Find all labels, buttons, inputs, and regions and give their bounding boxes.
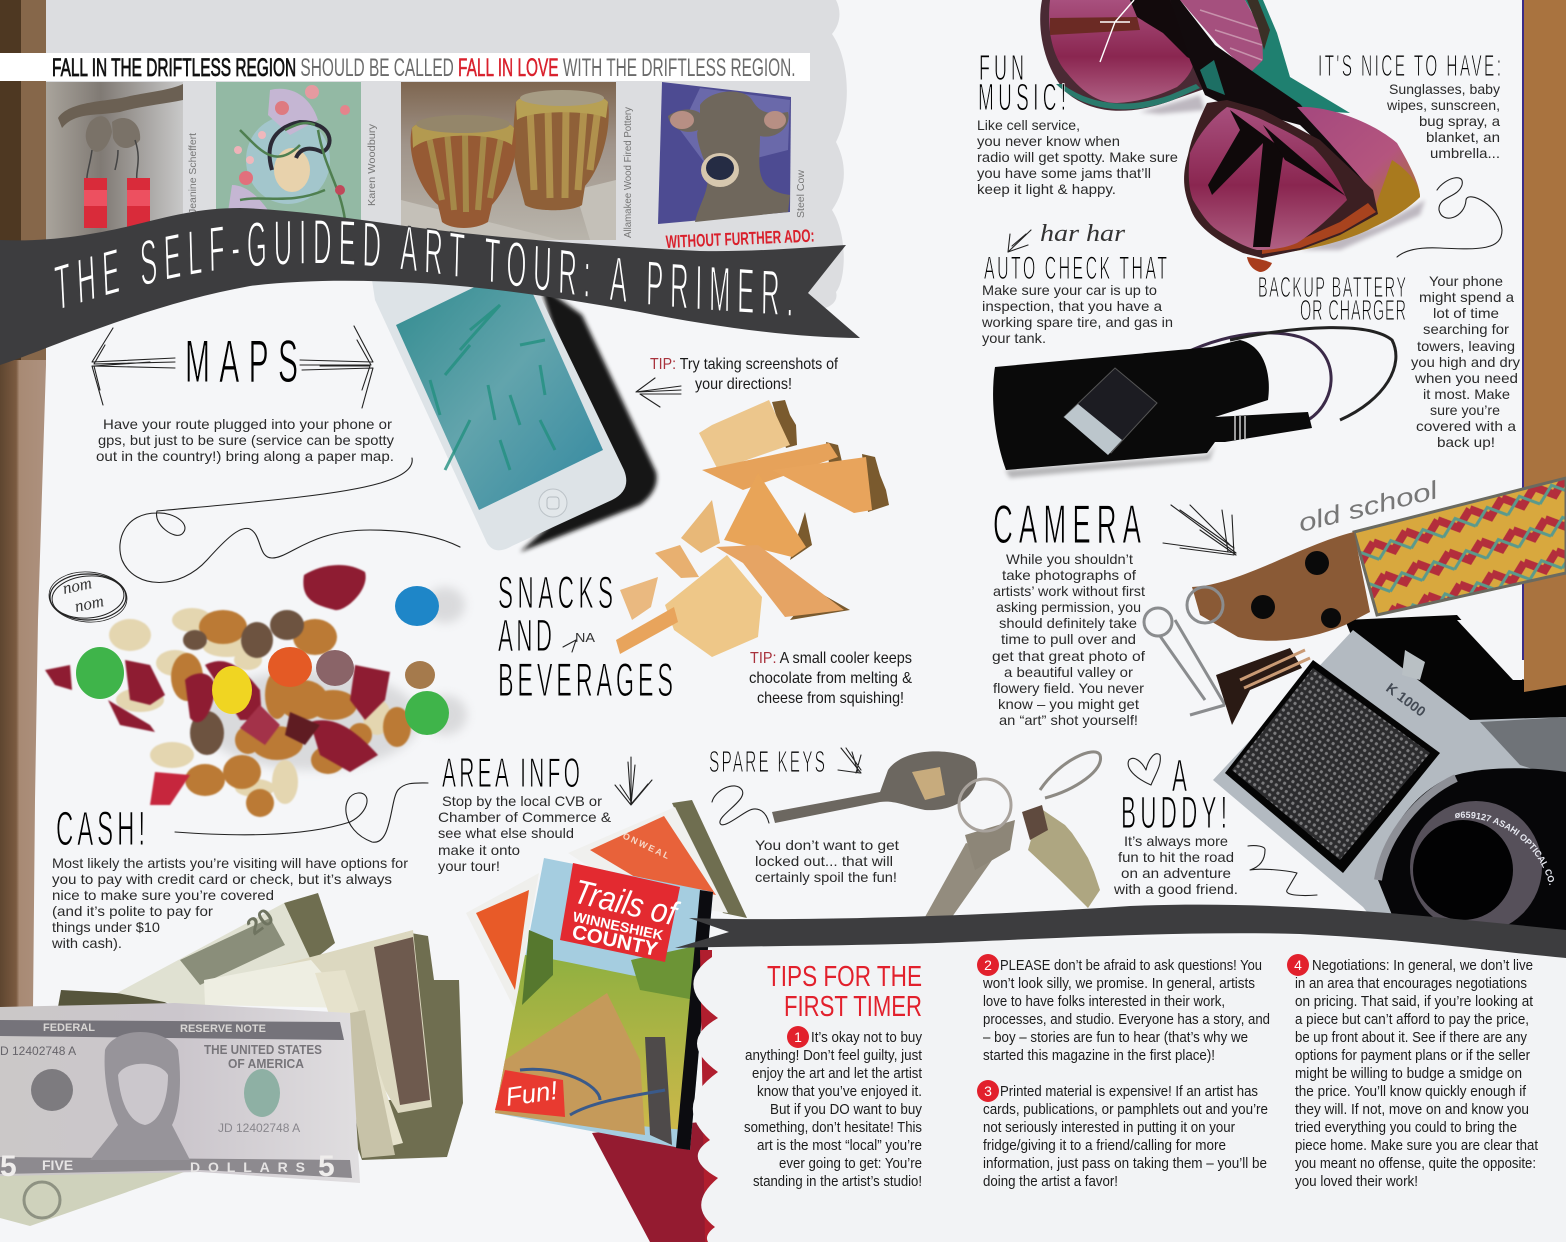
lens bbox=[1374, 768, 1566, 930]
squiggle: buddy bbox=[1248, 846, 1317, 895]
tip 1: 1 bbox=[794, 1029, 802, 1045]
bottom bill bbox=[0, 1170, 190, 1226]
connector bbox=[1064, 368, 1157, 453]
text: area info body bbox=[438, 793, 612, 874]
photo: phone bbox=[372, 265, 657, 552]
heading: maps bbox=[92, 326, 373, 408]
heading: a buddy: BUDDY! bbox=[1121, 788, 1227, 838]
tip 4: 4 bbox=[1294, 957, 1302, 973]
body bbox=[993, 340, 1269, 470]
temple arm seen through lens bbox=[1208, 110, 1347, 247]
text: area info body: your tour! bbox=[438, 858, 500, 874]
lens engraving: ø659127 ASAHI OPTICAL CO. bbox=[1455, 812, 1554, 886]
text: fun music body: you have some jams that’ll bbox=[977, 165, 1151, 181]
left lens bbox=[1049, 0, 1193, 103]
banner: main title bbox=[0, 208, 860, 365]
text: maps body: gps, but just to be sure (service can be spotty bbox=[98, 432, 394, 448]
bill: stack bbox=[205, 930, 432, 1113]
text: auto check body: working spare tire, and gas in bbox=[981, 314, 1173, 330]
heading: snacks and beverages bbox=[498, 568, 673, 706]
photo: sunglasses bbox=[1040, 0, 1425, 272]
heading: snacks and beverages: BEVERAGES bbox=[498, 653, 673, 706]
heading: snacks and beverages: AND bbox=[498, 611, 552, 661]
text: auto check body: your tank. bbox=[982, 330, 1046, 346]
icon: small feathers bbox=[838, 748, 861, 773]
temple frame bbox=[1245, 0, 1350, 113]
left cup bbox=[411, 118, 516, 228]
photo: keys bbox=[772, 751, 1101, 917]
tip: screenshots: TIP: Try taking screenshots of bbox=[650, 356, 838, 373]
heading: snacks and beverages: SNACKS bbox=[498, 568, 613, 618]
cranberries bbox=[45, 565, 390, 805]
text: auto check body bbox=[981, 282, 1173, 346]
tip 3: Printed material is expensive! If an artist has bbox=[1000, 1084, 1258, 1100]
wood table left bbox=[0, 0, 46, 1010]
tip 4: options for payment plans or if the seller bbox=[1295, 1048, 1530, 1064]
text: backup battery body: covered with a bbox=[1416, 418, 1516, 434]
cover title block: WINNESHIEK bbox=[571, 908, 665, 943]
text: backup battery body: searching for bbox=[1423, 321, 1509, 337]
bill labels: FEDERAL bbox=[43, 1022, 95, 1034]
tip 2: started this magazine in the first place)! bbox=[983, 1048, 1215, 1064]
text: camera body: a beautiful valley or bbox=[1004, 664, 1133, 680]
text: backup battery body: it most. Make bbox=[1423, 386, 1510, 402]
text: keys body bbox=[755, 837, 899, 885]
ribbon: tips divider bbox=[675, 905, 1566, 958]
text: cash body: (and it’s polite to pay for bbox=[52, 903, 213, 919]
wood table right bbox=[1522, 0, 1566, 700]
tip 4: be up front about it. See if there are any bbox=[1295, 1030, 1528, 1046]
old school note: old school bbox=[1296, 476, 1442, 538]
photo: chips bbox=[616, 400, 889, 657]
upper right lens bbox=[1180, 0, 1263, 73]
heading: camera: CAMERA bbox=[993, 495, 1141, 556]
nose pad bbox=[1247, 257, 1272, 272]
icon: camera feathers bbox=[1163, 505, 1236, 555]
main lens frame bbox=[1184, 100, 1378, 258]
banner title text: THE SELF-GUIDED ART TOUR: A PRIMER. bbox=[54, 220, 791, 316]
text: camera body: should definitely take bbox=[999, 615, 1137, 631]
caption: Allamakee Wood Fired Pottery: Allamakee Wood Fired Pottery bbox=[623, 107, 634, 238]
olive shadows bbox=[284, 893, 335, 962]
tip 2: won’t look silly, we promise. In general, artists bbox=[982, 976, 1255, 992]
heading: area info bbox=[442, 750, 652, 805]
tip: cooler: TIP: A small cooler keeps bbox=[750, 650, 912, 667]
tip 2: 2 bbox=[984, 957, 992, 973]
portrait bbox=[90, 1032, 190, 1160]
tip 4: the price. You’ll know quickly enough if bbox=[1295, 1084, 1527, 1100]
text: keys body: locked out... that will bbox=[755, 853, 893, 869]
doodle: NA: NA bbox=[575, 630, 595, 645]
tip 1: know that you’ve enjoyed it. bbox=[757, 1084, 922, 1100]
photo: wood-fired cups bbox=[401, 82, 616, 240]
gold end piece bbox=[1280, 160, 1420, 253]
top plate highlight bbox=[1480, 717, 1566, 780]
text: fun music body: keep it light & happy. bbox=[977, 181, 1116, 197]
K1000 logo: K 1000 bbox=[1383, 680, 1429, 720]
tip 4: tried everything you could to bring the bbox=[1295, 1120, 1517, 1136]
caption: Jeanine Scheffert: Jeanine Scheffert bbox=[188, 133, 199, 214]
text: backup battery body: might spend a bbox=[1419, 289, 1514, 305]
text: cash body: things under $10 bbox=[52, 919, 160, 935]
text: camera body: take photographs of bbox=[1002, 567, 1136, 583]
text: camera body: artists’ work without first bbox=[993, 583, 1145, 599]
tip 1: But if you DO want to buy bbox=[770, 1102, 923, 1118]
M&M green bbox=[76, 647, 124, 699]
shadows bbox=[200, 587, 467, 770]
tip 3 bbox=[977, 1080, 1268, 1190]
tip 2: love to have folks interested in their work, bbox=[983, 994, 1225, 1010]
text: buddy body: It’s always more bbox=[1124, 833, 1228, 849]
text: camera body: While you shouldn’t bbox=[1006, 551, 1133, 567]
silver key bbox=[925, 843, 997, 917]
text: backup battery body bbox=[1411, 273, 1520, 450]
heading: a buddy bbox=[1121, 751, 1227, 838]
heading: maps: MAPS bbox=[185, 329, 298, 396]
clasp bbox=[1144, 587, 1225, 715]
text: backup battery body: lot of time bbox=[1433, 305, 1499, 321]
tip 1: It’s okay not to buy bbox=[811, 1030, 923, 1046]
nuts bbox=[109, 608, 391, 804]
front five dollar bill: 5 bbox=[318, 1150, 335, 1183]
tip 4: on pricing. That said, if you’re looking at bbox=[1295, 994, 1533, 1010]
crimson booklet bbox=[592, 1120, 740, 1242]
text: backup battery body: towers, leaving bbox=[1417, 338, 1515, 354]
tip 3: not seriously interested in putting it on your bbox=[983, 1120, 1235, 1136]
right cup bbox=[513, 92, 609, 210]
M&M grey-brown bbox=[316, 650, 354, 686]
text: nice to have body bbox=[1386, 81, 1500, 161]
chocolate pieces bbox=[183, 610, 304, 755]
front five dollar bill: D 12402748 A bbox=[0, 1044, 76, 1058]
dark key bbox=[772, 751, 977, 823]
text: camera body: flowery field. You never bbox=[993, 680, 1144, 696]
front five dollar bill: DOLLARS bbox=[190, 1159, 305, 1175]
caption: Steel Cow: Steel Cow bbox=[796, 169, 807, 218]
plug bbox=[1215, 412, 1312, 442]
tip 4: in an area that encourages negotiations bbox=[1295, 976, 1527, 992]
text: cash body: nice to make sure you’re covered bbox=[52, 887, 274, 903]
tip: screenshots: your directions! bbox=[695, 376, 792, 393]
heading: spare keys: SPARE KEYS bbox=[709, 745, 825, 780]
tip 2: PLEASE don’t be afraid to ask questions! You bbox=[1000, 958, 1262, 974]
text: cash body: with cash). bbox=[51, 935, 122, 951]
tip 4 bbox=[1287, 954, 1538, 1190]
text: camera body: asking permission, you bbox=[996, 599, 1141, 615]
front five dollar bill: RESERVE NOTE bbox=[180, 1023, 266, 1035]
seals bbox=[31, 1069, 73, 1111]
tip 4: you loved their work! bbox=[1295, 1174, 1418, 1190]
tip: screenshots bbox=[636, 356, 838, 407]
text: buddy body bbox=[1113, 833, 1238, 897]
fun label: Fun! bbox=[504, 1075, 559, 1112]
text: nice to have body: wipes, sunscreen, bbox=[1386, 97, 1500, 113]
photo: charger bbox=[993, 328, 1396, 478]
icon: heart bbox=[1128, 754, 1160, 785]
tip 1 bbox=[744, 1026, 923, 1190]
text: buddy body: with a good friend. bbox=[1113, 881, 1238, 897]
heading: backup battery: OR CHARGER bbox=[1300, 293, 1406, 326]
front five dollar bill: 5 bbox=[0, 1150, 17, 1183]
M&M green 2 bbox=[405, 691, 449, 735]
front five dollar bill: OF AMERICA bbox=[228, 1056, 305, 1071]
text: area info body: Chamber of Commerce & bbox=[438, 809, 612, 825]
text: maps body: out in the country!) bring along a paper map. bbox=[96, 448, 394, 464]
fun label bbox=[495, 1070, 565, 1117]
tip 4: a piece but can’t afford to pay the price, bbox=[1295, 1012, 1529, 1028]
leather grip bbox=[1225, 660, 1440, 873]
icon: left arrow bbox=[92, 328, 175, 405]
key ring loop bbox=[1040, 752, 1101, 798]
doodle: har har: har har bbox=[1040, 221, 1126, 247]
cover bbox=[495, 858, 713, 1150]
text: backup battery body: you high and dry bbox=[1411, 354, 1520, 370]
text: backup battery body: sure you’re bbox=[1430, 402, 1500, 418]
doodle: nom nom bbox=[47, 569, 129, 625]
strap bbox=[1354, 478, 1566, 615]
left pamphlet bbox=[466, 873, 539, 1010]
tips heading: FIRST TIMER bbox=[784, 991, 922, 1023]
tip 3: fridge/giving it to a friend/calling for more bbox=[983, 1138, 1226, 1154]
dial bbox=[1402, 650, 1425, 680]
heading: it's nice to have: IT'S NICE TO HAVE: bbox=[1318, 49, 1501, 84]
cable loops bbox=[1161, 333, 1331, 420]
tip 1: something, don’t hesitate! This bbox=[744, 1120, 922, 1136]
heading: fun music: FUN bbox=[979, 48, 1024, 89]
tip 3: 3 bbox=[984, 1083, 992, 1099]
central band bbox=[1170, 0, 1373, 195]
text: cash body: you to pay with credit card or check, but it’s always bbox=[52, 871, 392, 887]
glare bbox=[1100, 0, 1134, 62]
text: fun music body: Like cell service, bbox=[977, 117, 1080, 133]
heading: cash bbox=[56, 783, 428, 856]
text: keys body: You don’t want to get bbox=[755, 837, 899, 853]
cover title block bbox=[560, 863, 683, 962]
text: camera body: get that great photo of bbox=[992, 648, 1145, 664]
left lens cross bar bbox=[1050, 17, 1140, 35]
M&M yellow bbox=[212, 666, 252, 714]
caption: Karen Woodbury: Karen Woodbury bbox=[367, 124, 378, 206]
tip 3: cards, publications, or pamphlets out and you’re bbox=[983, 1102, 1268, 1118]
heading: area info: AREA INFO bbox=[442, 750, 580, 797]
soft shadow bbox=[1005, 445, 1215, 478]
bicycle handlebars bbox=[520, 1069, 665, 1115]
rivets bbox=[1305, 551, 1329, 575]
squiggle: maps to snacks bbox=[120, 458, 460, 582]
brown nut bbox=[405, 661, 435, 689]
pamphlet label: ONWEAL bbox=[621, 831, 673, 862]
photo: floral painting bbox=[216, 82, 361, 232]
back pamphlet bbox=[568, 807, 728, 913]
heading: cash: CASH! bbox=[56, 803, 145, 856]
text: camera body: know – you might get bbox=[998, 696, 1139, 712]
pink frame panel bbox=[1297, 107, 1420, 214]
tip 4: Negotiations: In general, we don’t live bbox=[1312, 958, 1533, 974]
tip 1: art is the most “local” you’re bbox=[757, 1138, 922, 1154]
icon: down arrow bbox=[615, 757, 652, 805]
photo: steel cow canvas bbox=[658, 82, 791, 224]
tip 4: you meant no offense, quite the opposite: bbox=[1295, 1156, 1536, 1172]
icon: arrow to phone bbox=[636, 378, 681, 407]
heading: fun music bbox=[978, 48, 1066, 119]
text: backup battery body: when you need bbox=[1414, 370, 1518, 386]
text: backup battery body: Your phone bbox=[1429, 273, 1503, 289]
photo: trail guide brochures bbox=[466, 800, 747, 1242]
front five dollar bill bbox=[0, 1003, 360, 1183]
doodle: nom nom: nom bbox=[61, 573, 93, 598]
tip: cooler: cheese from squishing! bbox=[757, 690, 904, 707]
tip 3: information, just pass on taking them – you’ll be bbox=[983, 1156, 1267, 1172]
main lens bbox=[1189, 107, 1347, 250]
heading: fun music: MUSIC! bbox=[978, 77, 1066, 119]
icon: right arrow bbox=[300, 326, 373, 408]
text: camera body: an “art” shot yourself! bbox=[999, 712, 1138, 728]
text: auto check body: Make sure your car is up to bbox=[982, 282, 1157, 298]
heading: backup battery bbox=[1258, 270, 1406, 326]
gold key bbox=[1028, 808, 1100, 908]
tip 1: enjoy the art and let the artist bbox=[752, 1066, 922, 1082]
shadow strip bbox=[672, 800, 747, 918]
M&M orange bbox=[268, 647, 312, 687]
text: backup battery body: back up! bbox=[1437, 434, 1495, 450]
M&M blue bbox=[395, 586, 439, 626]
photo: money bbox=[0, 893, 463, 1226]
text: camera body: time to pull over and bbox=[1001, 631, 1136, 647]
tip 4: piece home. Make sure you are clear that bbox=[1295, 1138, 1538, 1154]
text: area info body: make it onto bbox=[438, 842, 520, 858]
text: fun music body bbox=[977, 117, 1178, 197]
text: maps body: Have your route plugged into your phone or bbox=[103, 416, 392, 432]
text: area info body: see what else should bbox=[438, 825, 574, 841]
tip 2: processes, and studio. Everyone has a story, and bbox=[983, 1012, 1270, 1028]
photo: earrings bbox=[46, 82, 183, 240]
strip text: FALL IN THE DRIFTLESS REGION SHOULD BE CALLED FALL IN LOVE WITH THE DRIFTLESS REGION. bbox=[52, 55, 796, 82]
heading: backup battery: BACKUP BATTERY bbox=[1258, 270, 1406, 303]
bill: twenty bbox=[117, 903, 318, 1005]
doodle: nom nom: nom bbox=[73, 591, 105, 616]
panel: tips for the first timer bbox=[693, 935, 1566, 1242]
tip 3: doing the artist a favor! bbox=[983, 1174, 1118, 1190]
cover title block: Trails of bbox=[570, 873, 683, 934]
doodle: har har bbox=[1008, 221, 1126, 252]
text: buddy body: on an adventure bbox=[1121, 865, 1231, 881]
text: fun music body: radio will get spotty. Make sure bbox=[977, 149, 1178, 165]
squiggle: keys bbox=[712, 786, 769, 825]
icon: small arrow bbox=[1008, 230, 1031, 252]
squiggle: sunglasses bbox=[1397, 178, 1502, 257]
tips heading bbox=[767, 961, 922, 1023]
text: nice to have body: Sunglasses, baby bbox=[1389, 81, 1500, 97]
photo: camera with strap bbox=[1142, 476, 1566, 930]
black cast shadow bbox=[1345, 615, 1566, 760]
body bbox=[1213, 630, 1566, 935]
twenty label: 20 bbox=[242, 903, 279, 941]
text: buddy body: fun to hit the road bbox=[1118, 849, 1234, 865]
doodle: NA bbox=[563, 630, 595, 652]
red under tips panel bbox=[700, 950, 745, 1242]
left lens frame bbox=[1040, 0, 1215, 111]
tip 1: anything! Don’t feel guilty, just bbox=[745, 1048, 922, 1064]
tip: cooler bbox=[749, 650, 912, 707]
leather tab bbox=[1192, 532, 1370, 641]
heading: a buddy: A bbox=[1172, 751, 1187, 801]
header strip bbox=[0, 53, 810, 82]
text: keys body: certainly spoil the fun! bbox=[755, 869, 897, 885]
tip 1: ever going to get: You’re bbox=[779, 1156, 922, 1172]
text: camera body bbox=[992, 551, 1145, 728]
text: maps body bbox=[96, 416, 394, 464]
tip 2: – boy – stories are fun to hear (that’s why we bbox=[983, 1030, 1248, 1046]
front five dollar bill: THE UNITED STATES bbox=[204, 1042, 322, 1057]
key tie bbox=[1022, 805, 1048, 840]
paper notch above wood bbox=[1457, 620, 1522, 680]
under shadow bbox=[1140, 95, 1425, 250]
text: cash body: Most likely the artists you’re visiting will have options for bbox=[52, 855, 408, 871]
tips heading: TIPS FOR THE bbox=[767, 961, 922, 993]
tip 1: standing in the artist’s studio! bbox=[753, 1174, 922, 1190]
panel: grey header with scallops bbox=[46, 0, 847, 310]
text: auto check body: inspection, that you have a bbox=[982, 298, 1162, 314]
front five dollar bill: JD 12402748 A bbox=[218, 1121, 300, 1135]
text: nice to have body: umbrella... bbox=[1430, 145, 1500, 161]
text: nice to have body: bug spray, a bbox=[1419, 113, 1500, 129]
toasted pieces bbox=[171, 610, 411, 817]
text: area info body: Stop by the local CVB or bbox=[442, 793, 602, 809]
tip 4: they will. If not, move on and know you bbox=[1295, 1102, 1529, 1118]
tip: cooler: chocolate from melting & bbox=[749, 670, 912, 687]
tip 4: might be willing to budge a smidge on bbox=[1295, 1066, 1522, 1082]
photo: trail mix bbox=[45, 565, 467, 817]
heading: auto check that: AUTO CHECK THAT bbox=[984, 251, 1167, 287]
text: fun music body: you never know when bbox=[977, 133, 1120, 149]
lead-in: without further ado: WITHOUT FURTHER ADO: bbox=[665, 227, 815, 253]
tip 2 bbox=[977, 954, 1270, 1064]
text: cash body bbox=[51, 855, 408, 951]
text: nice to have body: blanket, an bbox=[1426, 129, 1500, 145]
front five dollar bill: FIVE bbox=[42, 1157, 73, 1173]
cover title block: COUNTY bbox=[570, 921, 660, 961]
squiggle: cash bbox=[175, 783, 428, 842]
